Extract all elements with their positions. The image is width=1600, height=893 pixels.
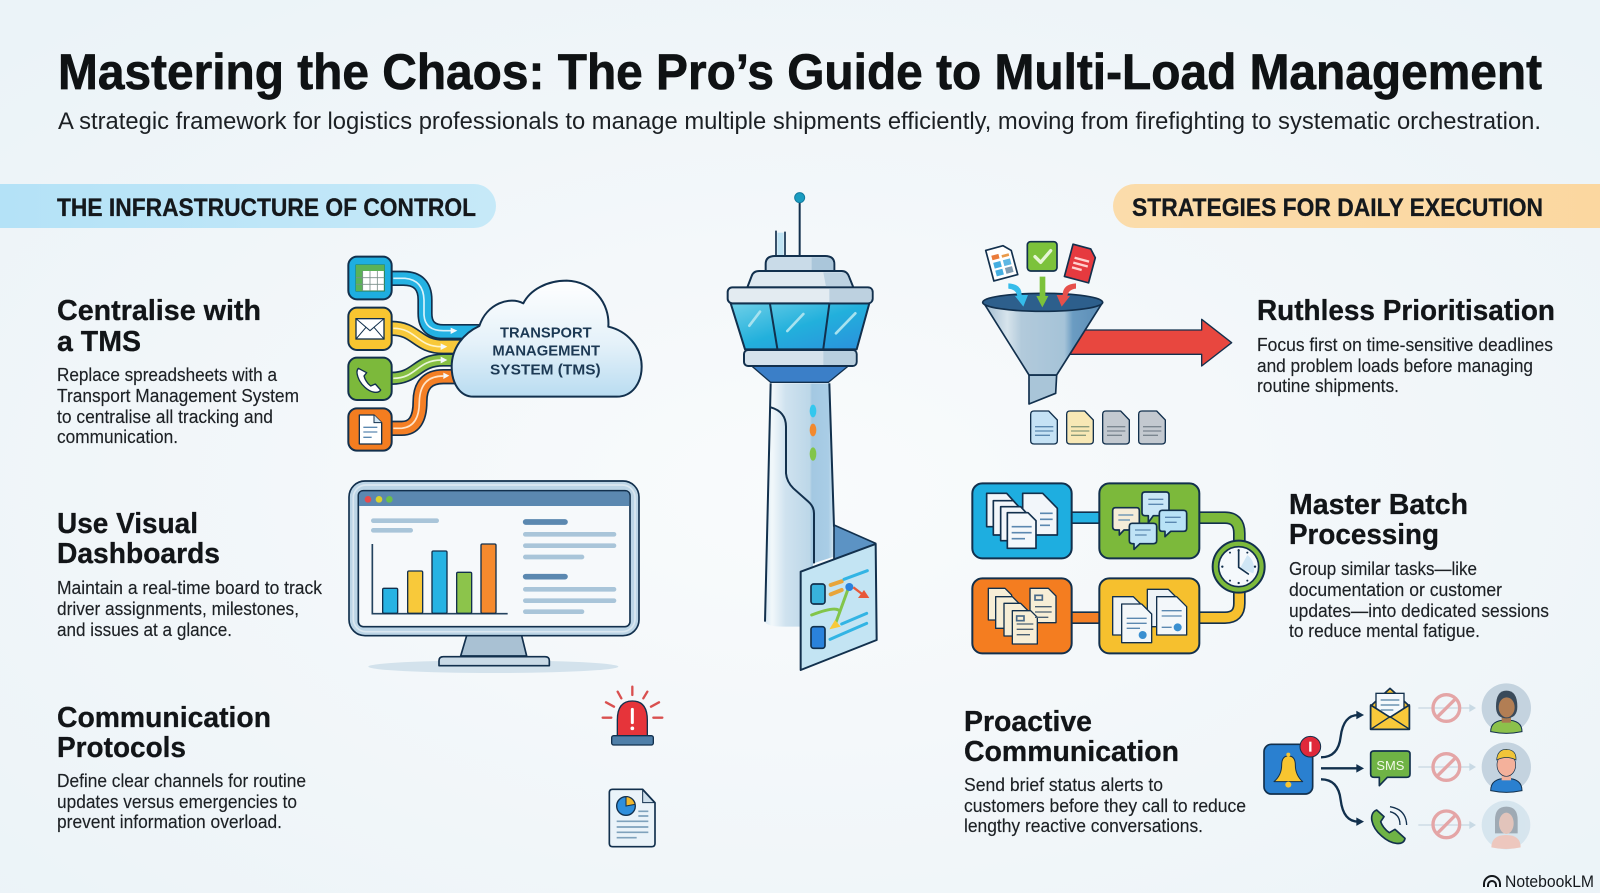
icon: alert bell [1264,736,1321,794]
icon: red siren [603,687,662,745]
funnel body [983,293,1103,404]
batch processing workflow illustration [972,483,1265,653]
NotebookLM watermark: NotebookLM [1505,873,1594,891]
green box: chat bubbles [1099,483,1199,558]
subtitle: A strategic framework for logistics professionals to manage multiple shipments efficiently, moving from firefighting to systematic orchestration. [58,108,1541,135]
connectors [1072,518,1239,618]
text block: master batch processing [1289,489,1549,641]
text block: proactive communication: Proactive [964,706,1092,738]
dashboard monitor illustration [349,481,639,673]
text block: proactive communication: Send brief status alerts to [964,774,1163,795]
icon: email [1371,688,1409,729]
clock [1213,541,1265,593]
section banner: infrastructure of control [0,184,496,228]
text block: use visual dashboards [57,508,323,640]
icon: document [348,408,392,451]
avatar: customer one [1482,683,1531,733]
text block: communication protocols: Define clear channels for routine [57,770,306,791]
text block: communication protocols [57,702,306,832]
icon: phone [348,358,392,400]
text block: centralise with a TMS: Replace spreadsheets with a [57,364,278,385]
cloud: SYSTEM (TMS) [490,361,601,378]
icon: SMS bubble: SMS [1376,759,1404,773]
text block: communication protocols: Communication [57,702,271,734]
bar chart [372,544,508,614]
text block: centralise with a TMS: Transport Management System [57,385,299,406]
icon: SMS bubble [1371,751,1410,786]
icon: report document [609,789,655,847]
text block: centralise with a TMS: communication. [57,426,178,447]
text block: proactive communication: customers before they call to reduce [964,795,1246,816]
text block: ruthless prioritisation: Focus first on time-sensitive deadlines [1257,334,1553,355]
text block: centralise with a TMS: a TMS [57,326,141,358]
text block: use visual dashboards: Dashboards [57,538,220,570]
icon: spreadsheet [348,257,392,299]
text block: master batch processing: Processing [1289,519,1439,551]
text block: centralise with a TMS: to centralise all tracking and [57,406,273,427]
cloud: MANAGEMENT [492,343,600,360]
feed arrows [1008,277,1076,307]
section banner: infrastructure of control: THE INFRASTRUCTURE OF CONTROL [57,194,476,222]
text block: centralise with a TMS [57,295,299,447]
text block: master batch processing: updates—into dedicated sessions [1289,600,1549,621]
red priority arrow [1070,319,1232,366]
text block: master batch processing: Master Batch [1289,489,1468,521]
text block: use visual dashboards: and issues at a glance. [57,619,232,640]
proactive communication flow illustration [1264,683,1531,849]
top documents [986,242,1097,283]
text block: ruthless prioritisation [1257,295,1555,396]
control tower illustration [728,193,877,670]
text block: proactive communication: Communication [964,736,1179,768]
TMS diagram: sources flowing into cloud [348,257,642,451]
text block: proactive communication: lengthy reactive conversations. [964,815,1203,836]
text block: master batch processing: documentation or customer [1289,579,1502,600]
icon: envelope [348,308,392,350]
text block: proactive communication [964,706,1246,836]
text block: ruthless prioritisation: Ruthless Prioritisation [1257,295,1555,327]
avatar: customer three (faded) [1482,801,1530,849]
flow arrows [1321,711,1363,825]
text block: communication protocols: updates versus emergencies to [57,791,297,812]
section banner: strategies for daily execution: STRATEGIES FOR DAILY EXECUTION [1132,194,1543,222]
blocked reactive calls [1418,695,1476,838]
text block: communication protocols: Protocols [57,732,186,764]
icon: ringing phone [1372,807,1407,843]
text block: communication protocols: prevent information overload. [57,811,282,832]
section banner: strategies for daily execution [1113,184,1600,228]
yellow box: documents with seals [1099,578,1199,653]
title: Mastering the Chaos: The Pro’s Guide to Multi-Load Management [58,44,1542,100]
cloud [452,281,642,397]
blue collar [752,366,848,382]
text block: use visual dashboards: Maintain a real-time board to track [57,577,323,598]
cloud: TRANSPORT [500,324,592,341]
text block: ruthless prioritisation: and problem loads before managing [1257,355,1533,376]
text block: use visual dashboards: driver assignments, milestones, [57,598,299,619]
orange box: documents [972,578,1072,653]
text block: use visual dashboards: Use Visual [57,508,198,540]
prioritisation funnel illustration [983,242,1232,444]
avatar: customer two [1482,742,1531,792]
clipboard panel [801,525,877,670]
text block: ruthless prioritisation: routine shipments. [1257,375,1399,396]
text block: centralise with a TMS: Centralise with [57,295,261,327]
cab windows [731,303,869,349]
connectors [392,278,483,428]
tower shaft [765,383,834,627]
text block: master batch processing: to reduce mental fatigue. [1289,620,1480,641]
output documents [1031,411,1165,444]
blue box: documents [972,483,1072,558]
text block: master batch processing: Group similar tasks—like [1289,558,1477,579]
